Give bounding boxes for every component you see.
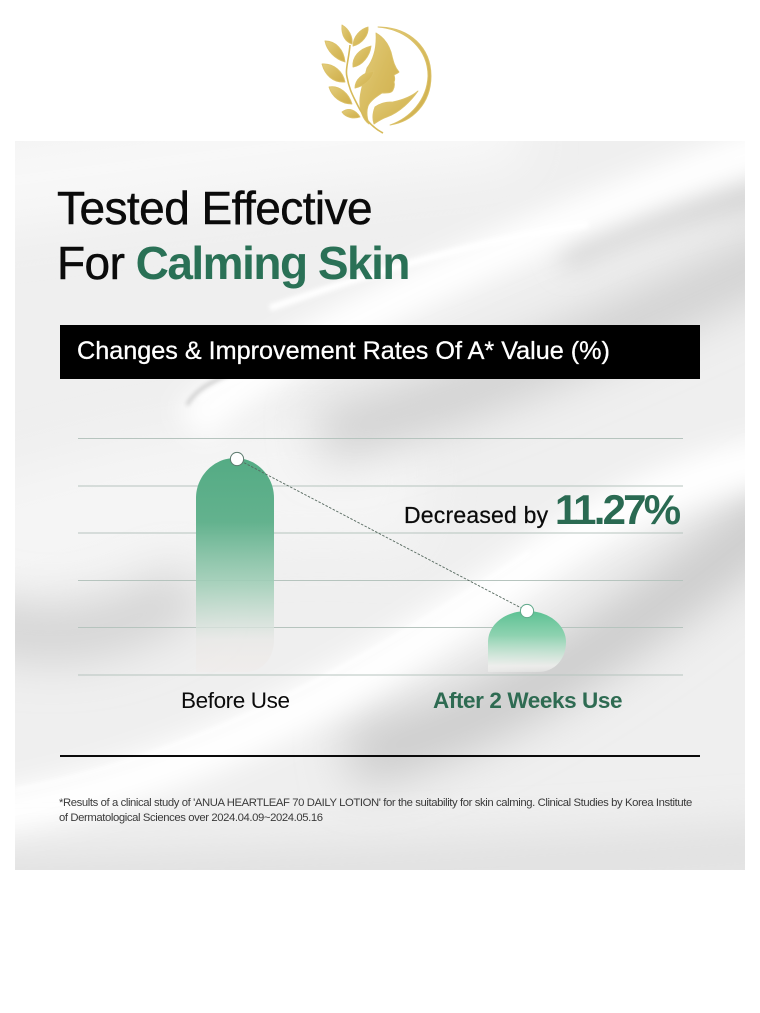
callout: decreased by: Decreased by 11.27% [404, 486, 678, 533]
title: For Calming Skin [57, 237, 409, 289]
dashed trend line [237, 459, 527, 611]
footnote [59, 797, 692, 824]
logo: gold leaf branch and woman profile [322, 24, 432, 134]
label: after 2 weeks use: After 2 Weeks Use [433, 688, 622, 713]
grid lines [78, 438, 683, 675]
chart heading bar: Changes & Improvement Rates Of A* Value (%) [77, 337, 610, 365]
chart heading bar [60, 325, 700, 379]
title: Tested Effective [57, 182, 372, 234]
bar: before use [196, 458, 274, 672]
panel: silky cream background [15, 141, 745, 870]
bar: after 2 weeks [488, 611, 566, 672]
marker: after [520, 604, 534, 618]
footnote: of Dermatological Sciences over 2024.04.09~2024.05.16 [59, 812, 323, 824]
label: before use: Before Use [181, 688, 290, 713]
title [57, 182, 409, 289]
bar chart [78, 438, 683, 676]
marker: before [230, 452, 244, 466]
footnote: *Results of a clinical study of 'ANUA HEARTLEAF 70 DAILY LOTION' for the suitability for skin calming. Clinical Studies by Korea Institute [59, 797, 692, 809]
